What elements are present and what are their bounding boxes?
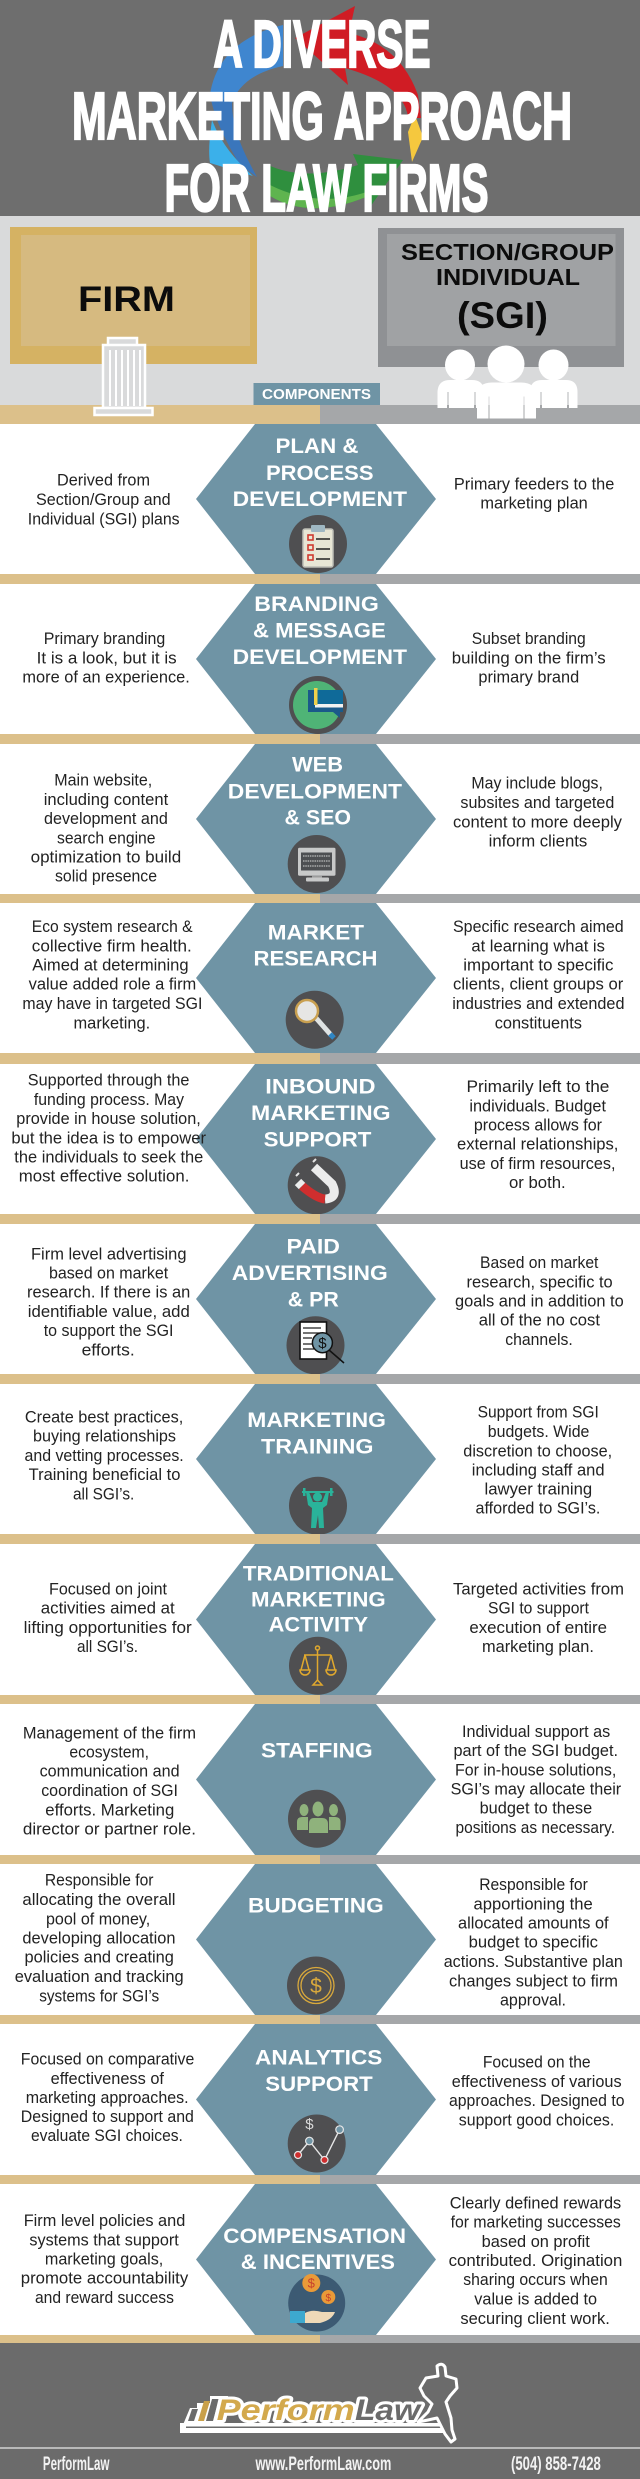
heading: PROCESS [266,462,374,485]
firm text [21,2050,194,2145]
firm text: Individual (SGI) plans [28,509,180,528]
icon: hand receiving coins: $ [326,2293,332,2304]
icon: document with dollar magnifier [286,1316,344,1374]
firm text: Responsible for [45,1871,154,1890]
SGI text: for marketing successes [451,2212,621,2232]
heading: ACTIVITY [269,1614,368,1637]
heading: ADVERTISING [232,1262,388,1285]
panel: SGI box [378,228,624,367]
SGI text: Focused on the [483,2053,591,2072]
heading: MARKETING [247,1409,386,1432]
firm text: Derived from [57,471,150,490]
band [0,734,640,744]
heading: MARKETING [251,1102,391,1125]
firm text: including content [44,790,168,809]
icon: analytics line chart: $ [305,2116,314,2133]
panel: budgeting [15,1864,623,2015]
firm text: effectiveness of [51,2069,164,2088]
firm text: policies and creating [24,1948,174,1967]
firm text: and reward success [35,2288,174,2307]
SGI text: process allows for [474,1116,602,1135]
SGI text: Based on market [480,1253,599,1272]
heading: & MESSAGE [253,619,386,642]
firm text: Firm level policies and [24,2211,185,2230]
firm text: all SGI’s. [77,1637,138,1656]
heading: DEVELOPMENT [233,488,407,511]
SGI text: May include blogs, [471,774,603,793]
heading [243,1563,394,1637]
panel: inbound marketing support [11,1064,618,1214]
heading [223,2225,406,2274]
title: A DIVERSE [214,7,430,82]
panel: paid advertising and PR [27,1224,624,1374]
SGI text: part of the SGI budget. [454,1741,618,1760]
title [72,7,572,226]
SGI text [455,1253,624,1349]
icon: branding chat book [289,676,347,734]
SGI text: clients, client groups or [453,975,624,994]
SGI text: content to more deeply [453,812,622,831]
firm text: most effective solution. [19,1167,189,1186]
SGI text: all of the no cost [479,1311,600,1330]
band [0,894,640,903]
firm text: Management of the firm [23,1723,196,1742]
firm text: may have in targeted SGI [22,994,202,1013]
heading: MARKETING [251,1588,386,1611]
SGI text: contributed. Origination [449,2251,622,2270]
firm text: marketing approaches. [26,2088,189,2107]
hexagon [196,1544,436,1695]
firm text: efforts. [82,1340,135,1359]
band [0,1374,640,1384]
icon: hand receiving coins [288,2274,345,2332]
SGI text: Individual support as [462,1722,610,1741]
heading [254,921,378,971]
hexagon [196,2184,436,2335]
panel: staffing [23,1704,622,1855]
icon: analytics line chart [288,2114,346,2172]
SGI text: budget to specific [469,1933,598,1952]
contact: phone: (504) 858-7428 [511,2454,601,2475]
firm text: Training beneficial to [29,1465,180,1484]
hexagon [196,903,436,1053]
icon: document with dollar magnifier: $ [318,1335,327,1352]
firm text: Designed to support and [21,2107,194,2126]
firm text: evaluate SGI choices. [31,2126,183,2145]
heading: TRAINING [261,1435,374,1458]
heading: BUDGETING [248,1894,384,1918]
SGI text: SGI’s may allocate their [451,1779,622,1798]
firm text: coordination of SGI [41,1781,178,1800]
panel: column headers [0,216,640,405]
hexagon [196,1224,436,1374]
heading: WEB [292,754,343,777]
band [0,2175,640,2184]
firm text: developing allocation [22,1929,176,1948]
panel: SGI box: SECTION/GROUP [401,239,614,265]
SGI text: actions. Substantive plan [444,1952,623,1971]
panel: plan and process development [28,424,614,574]
band: top divider [0,405,640,424]
firm text [22,917,202,1032]
firm text [24,1407,184,1503]
firm text: allocating the overall [22,1890,176,1909]
heading: DEVELOPMENT [228,780,402,803]
SGI text: Subset branding [472,629,586,648]
SGI text: at learning what is [471,936,605,955]
SGI text: Responsible for [479,1875,588,1894]
panel: web development and SEO [31,744,622,894]
firm text: systems that support [29,2230,179,2249]
heading [232,1236,388,1311]
firm text [23,1723,196,1838]
heading [255,2046,382,2096]
firm text: evaluation and tracking [15,1967,184,1986]
firm text: identifiable value, add [28,1302,190,1321]
SGI text: Primary feeders to the [454,474,614,493]
SGI text: use of firm resources, [460,1154,616,1173]
firm text: Eco system research & [32,917,193,936]
firm text: director or partner role. [23,1819,196,1838]
SGI text: including staff and [472,1460,604,1479]
heading: RESEARCH [254,948,378,971]
firm text: promote accountability [21,2269,189,2288]
SGI text [449,2053,624,2129]
firm text: communication and [40,1762,180,1781]
firm text: Create best practices, [25,1407,183,1426]
logo: PerformLaw [180,2364,457,2442]
firm text: more of an experience. [22,668,190,687]
panel: SGI box: (SGI) [457,295,548,336]
firm text: search engine [57,828,156,847]
heading: TRADITIONAL [243,1563,394,1586]
SGI text: individuals. Budget [469,1096,606,1115]
firm text: but the idea is to empower [11,1128,206,1147]
hexagon [196,744,436,894]
band [0,1214,640,1224]
heading [251,1076,391,1151]
SGI text: changes subject to firm [449,1971,618,1990]
SGI text: or both. [509,1173,566,1192]
firm text [11,1071,206,1186]
SGI text: Targeted activities from [453,1579,624,1598]
icon: clipboard [289,515,347,573]
SGI text [452,917,624,1032]
heading: ANALYTICS [255,2046,382,2070]
SGI text [449,2194,622,2328]
firm text: lifting opportunities for [24,1618,192,1637]
SGI text: Support from SGI [478,1403,599,1422]
firm text: development and [44,809,168,828]
heading: & INCENTIVES [241,2251,395,2274]
SGI text: apportioning the [474,1894,593,1913]
SGI text: SGI to support [488,1599,589,1618]
icon: hand receiving coins: $ [308,2276,316,2290]
SGI text: For in-house solutions, [455,1760,616,1779]
icon: monitor [288,835,346,893]
firm text: funding process. May [34,1090,184,1109]
logo: PerformLaw: Law [355,2394,422,2427]
panel: market research [22,903,624,1053]
SGI text: Specific research aimed [453,917,624,936]
firm text: provide in house solution, [16,1109,201,1128]
panel: traditional marketing activity [24,1544,624,1695]
SGI text [453,774,622,851]
SGI text: afforded to SGI’s. [476,1499,600,1518]
firm text: Focused on joint [49,1579,167,1598]
firm text [28,471,180,528]
SGI text: goals and in addition to [455,1292,624,1311]
SGI text: lawyer training [484,1480,592,1499]
SGI text: allocated amounts of [458,1913,609,1932]
heading: MARKET [268,921,364,944]
icon: weight lifter [289,1477,347,1535]
firm text [21,2211,189,2307]
band [0,574,640,584]
heading: SUPPORT [264,1128,372,1151]
band [0,1695,640,1704]
firm text: optimization to build [31,848,181,867]
heading [228,754,402,830]
firm text: to support the SGI [44,1321,174,1340]
SGI text: research, specific to [466,1272,613,1291]
SGI text: inform clients [489,832,587,851]
firm text: marketing goals, [45,2250,163,2269]
heading [247,1409,386,1458]
icon: circular arrows [209,6,423,210]
firm text: Supported through the [28,1071,189,1090]
hexagon [196,1384,436,1534]
heading: PAID [286,1236,340,1259]
SGI text: discretion to choose, [463,1441,612,1460]
hexagon [196,2024,436,2175]
SGI text: marketing plan. [482,1637,594,1656]
icon: dollar coin: $ [310,1975,322,1998]
panel: branding and message development [22,584,606,734]
SGI text [463,1403,612,1518]
SGI text: sharing occurs when [463,2270,608,2289]
firm text: pool of money, [46,1909,150,1928]
firm text: value added role a firm [29,975,196,994]
firm text: activities aimed at [41,1599,175,1618]
SGI text: important to specific [463,955,614,974]
logo: PerformLaw: Perform [217,2394,355,2427]
panel: marketing training [24,1384,612,1535]
firm text: marketing. [74,1013,150,1032]
SGI text: approaches. Designed to [449,2091,624,2110]
band [0,2015,640,2024]
header banner [0,0,640,226]
firm text: Focused on comparative [21,2050,194,2068]
footer [0,2343,640,2479]
icon: people group [438,346,578,418]
heading: & SEO [284,807,351,830]
SGI text [454,474,614,513]
panel: SGI box: INDIVIDUAL [436,264,580,290]
icon: magnifying glass [286,991,344,1049]
firm text: buying relationships [33,1427,176,1446]
band [0,1534,640,1544]
band [0,1855,640,1864]
firm text: and vetting processes. [24,1446,184,1465]
heading [233,593,407,669]
SGI text: subsites and targeted [460,793,614,812]
SGI text: constituents [495,1013,582,1032]
panel: analytics support [21,2024,625,2175]
SGI text: channels. [505,1330,573,1349]
firm text: Firm level advertising [31,1244,186,1263]
SGI text: effectiveness of various [452,2072,622,2091]
heading: STAFFING [261,1740,373,1763]
firm text [24,1579,192,1656]
SGI text: Primarily left to the [466,1077,609,1096]
SGI text: budgets. Wide [488,1422,589,1441]
icon: firm building [94,338,152,415]
firm text: Main website, [54,771,152,790]
panel: firm box: FIRM [78,280,175,319]
hexagon [196,424,436,574]
contact: website: www.PerformLaw.com [255,2454,391,2475]
SGI text [457,1077,618,1192]
SGI text: value is added to [474,2290,597,2308]
icon: magnet [288,1156,346,1214]
SGI text: execution of entire [469,1618,607,1637]
firm text [15,1871,184,2005]
SGI text: marketing plan [480,494,588,513]
SGI text: primary brand [478,668,579,687]
firm text: research. If there is an [27,1283,190,1302]
heading [233,435,407,511]
heading: INBOUND [265,1076,376,1099]
SGI text: approval. [500,1990,566,2009]
SGI text [453,1579,624,1656]
SGI text [452,629,606,687]
band [0,2335,640,2343]
panel: firm box [10,227,257,364]
SGI text: industries and extended [452,994,624,1013]
firm text: the individuals to seek the [14,1148,203,1167]
band [0,1053,640,1064]
label: components: COMPONENTS [262,387,371,403]
SGI text [451,1722,622,1837]
contact: name: PerformLaw [43,2454,110,2475]
firm text: Aimed at determining [32,955,189,974]
SGI text: external relationships, [457,1135,618,1154]
firm text: efforts. Marketing [45,1800,174,1819]
firm text: ecosystem, [69,1743,149,1762]
hexagon [196,1064,436,1214]
heading: & PR [288,1288,339,1311]
panel: compensation and incentives [21,2184,622,2335]
firm text [31,771,181,886]
SGI text: support good choices. [459,2110,614,2129]
SGI text [444,1875,623,2009]
heading: PLAN & [276,435,358,458]
heading: COMPENSATION [223,2225,406,2248]
firm text: Section/Group and [36,490,171,509]
icon: scales of justice [289,1637,347,1695]
label: components [254,383,380,405]
firm text: Primary branding [44,629,165,648]
heading: DEVELOPMENT [233,646,407,669]
heading: SUPPORT [265,2073,373,2096]
SGI text: Clearly defined rewards [450,2194,621,2213]
hexagon [196,584,436,734]
firm text: collective firm health. [32,936,192,955]
SGI text: building on the firm’s [452,648,606,667]
firm text: all SGI’s. [73,1484,134,1503]
icon: staff group [288,1790,346,1848]
SGI text: securing client work. [460,2309,610,2328]
SGI text: budget to these [480,1799,592,1818]
firm text: It is a look, but it is [37,648,177,667]
SGI text: based on profit [482,2232,590,2251]
firm text [27,1244,190,1359]
hexagon [196,1704,436,1855]
firm text [22,629,190,687]
firm text: systems for SGI’s [39,1986,159,2005]
firm text: based on market [49,1263,168,1282]
icon: dollar coin [287,1956,345,2014]
hexagon [196,1864,436,2015]
icon: runner [418,2364,457,2442]
heading: BRANDING [254,593,379,616]
firm text: solid presence [55,867,157,886]
SGI text: positions as necessary. [456,1818,615,1837]
